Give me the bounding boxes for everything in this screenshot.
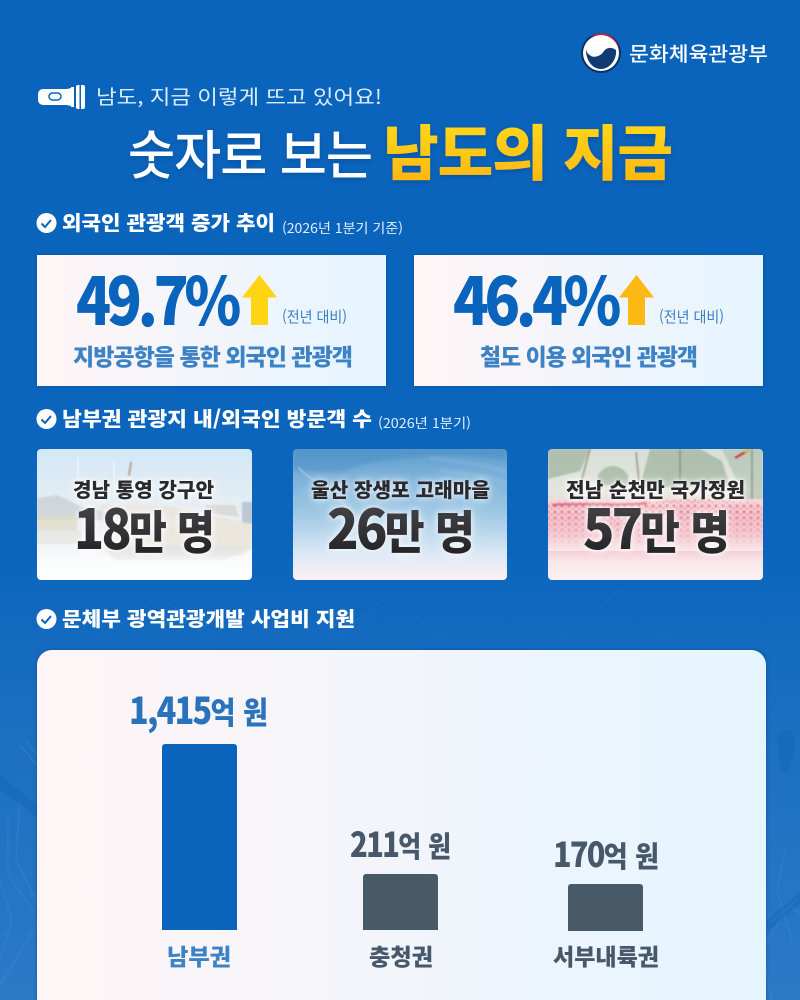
bar: west inland: 서부내륙권 xyxy=(553,938,659,972)
heading: budget support: 문체부 광역관광개발 사업비 지원 xyxy=(62,603,355,632)
bar: southern region: 1,415억 원 xyxy=(129,681,268,735)
panel: railway stat xyxy=(414,249,763,386)
panel: Tongyeong: 18만 명 xyxy=(74,485,214,565)
panel: budget bar chart xyxy=(37,650,766,1000)
panel: airport stat: 49.7% xyxy=(76,249,240,345)
panel: railway stat: (전년 대비) xyxy=(659,306,724,327)
panel: Suncheon: 57만 명 xyxy=(583,485,729,565)
bar: southern region xyxy=(129,681,268,972)
logo: ministry emblem and name xyxy=(581,33,768,73)
bar: Chungcheong: 211억 원 xyxy=(350,818,451,867)
heading: southern visitors: 남부권 관광지 내/외국인 방문객 수 xyxy=(62,403,372,432)
bar: west inland xyxy=(553,828,659,972)
kicker with flashlight icon: 남도, 지금 이렇게 뜨고 있어요! xyxy=(96,81,382,110)
arrow up xyxy=(619,275,654,325)
panel: airport stat: 지방공항을 통한 외국인 관광객 xyxy=(73,338,352,372)
panel: railway stat: 46.4% xyxy=(453,249,620,345)
logo: ministry emblem and name: 문화체육관광부 xyxy=(629,38,768,67)
icon: flashlight xyxy=(38,85,85,109)
panel: Suncheon: 전남 순천만 국가정원 xyxy=(566,474,745,503)
icon: check badge xyxy=(36,609,56,629)
icon: check badge xyxy=(36,409,56,429)
heading: southern visitors xyxy=(36,403,471,432)
bar: west inland: 170억 원 xyxy=(553,828,659,877)
panel: Ulsan xyxy=(293,449,507,580)
panel: airport stat xyxy=(37,249,386,386)
panel: Ulsan: 울산 장생포 고래마을 xyxy=(311,474,490,503)
heading: foreign visitor trend: 외국인 관광객 증가 추이 xyxy=(62,207,275,236)
bar: Chungcheong xyxy=(350,818,451,972)
title: 남도의 지금 xyxy=(383,106,672,193)
arrow up xyxy=(242,275,277,325)
heading: foreign visitor trend: (2026년 1분기 기준) xyxy=(282,217,403,237)
panel: Suncheon xyxy=(548,449,763,580)
title xyxy=(128,106,672,193)
panel: Tongyeong: 경남 통영 강구안 xyxy=(73,474,214,503)
title: 숫자로 보는 xyxy=(128,114,372,190)
bar: Chungcheong: 충청권 xyxy=(369,938,433,972)
panel: Tongyeong xyxy=(37,449,254,580)
icon: check badge xyxy=(36,213,56,233)
panel: airport stat: (전년 대비) xyxy=(282,306,347,327)
heading: southern visitors: (2026년 1분기) xyxy=(378,412,471,432)
bar: southern region: 남부권 xyxy=(167,938,231,972)
panel: Ulsan: 26만 명 xyxy=(327,485,474,565)
panel: railway stat: 철도 이용 외국인 관광객 xyxy=(480,338,697,372)
heading: foreign visitor trend xyxy=(36,207,403,237)
